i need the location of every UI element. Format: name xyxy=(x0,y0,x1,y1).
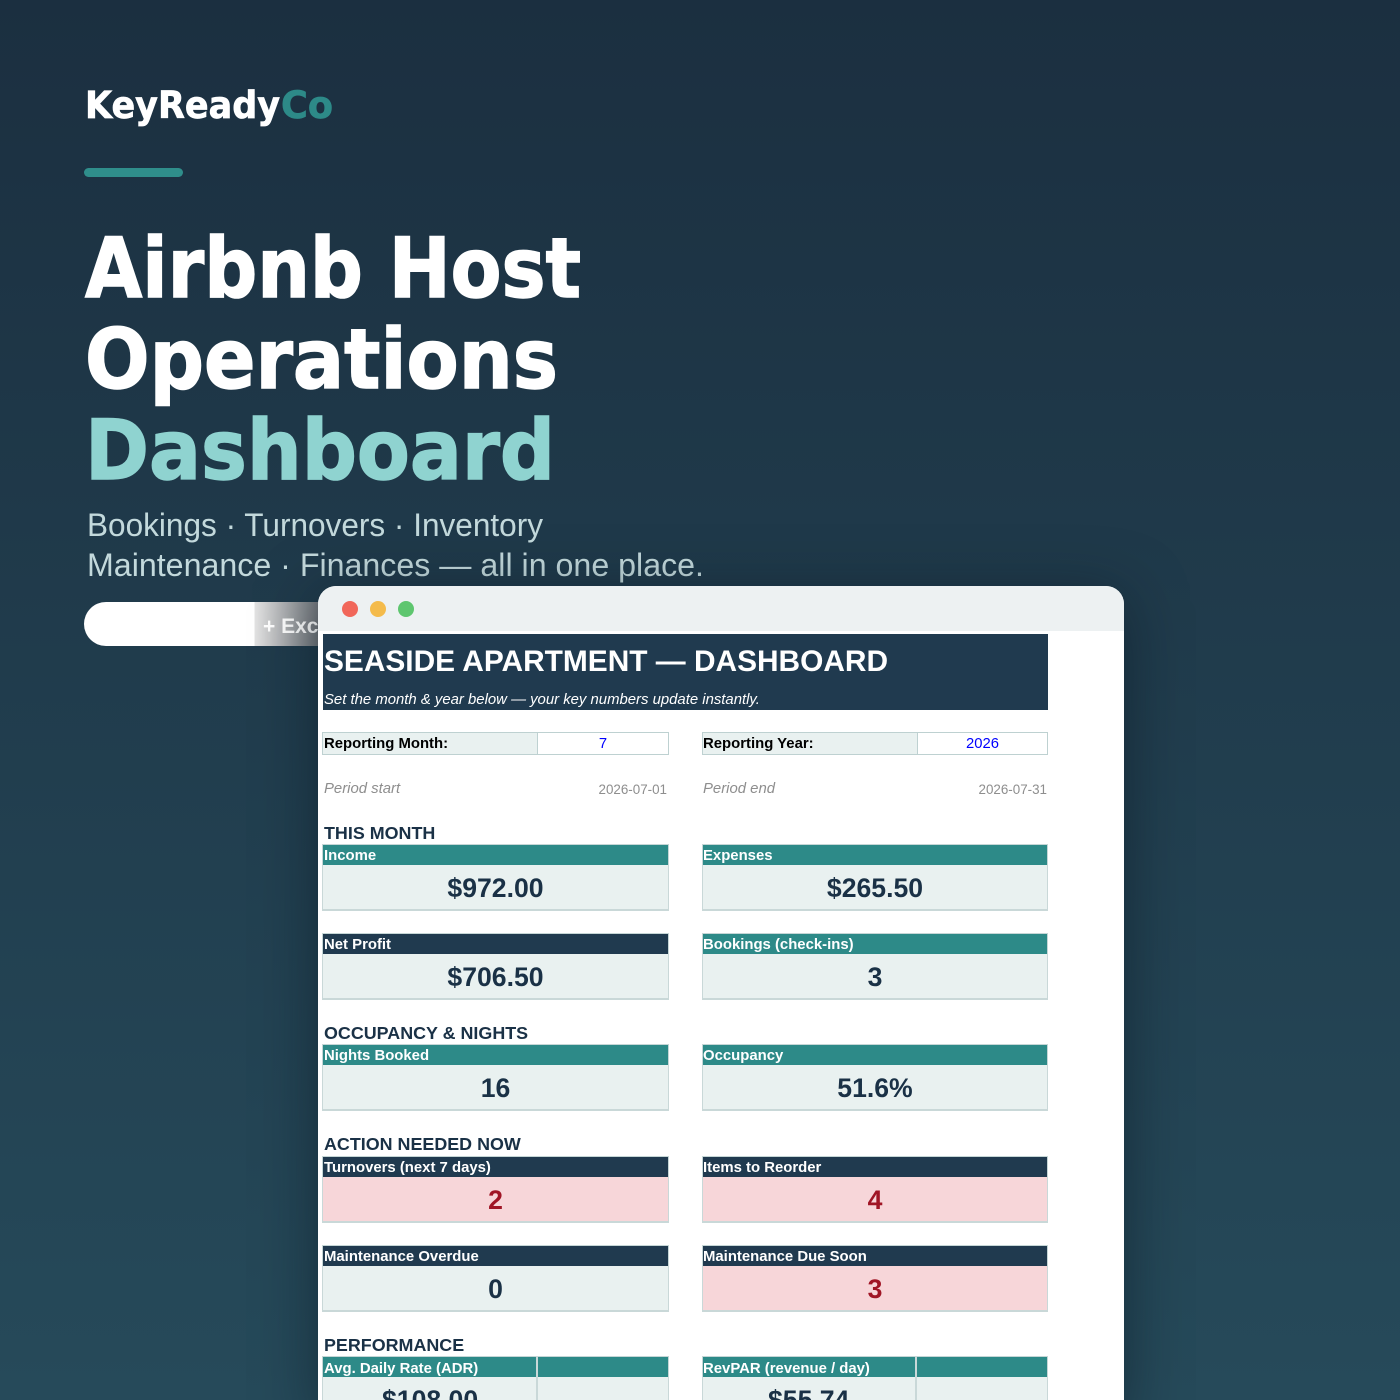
period start date: 2026-07-01 xyxy=(598,782,667,797)
kpi: maintenance overdue xyxy=(322,1245,669,1312)
badge pill: + Excel xyxy=(263,615,336,638)
title: Dashboard xyxy=(85,402,555,499)
window control: green xyxy=(398,601,414,617)
title xyxy=(84,220,581,499)
kpi: net profit xyxy=(322,933,669,1000)
kpi: occupancy: Occupancy xyxy=(703,1048,783,1064)
reporting year: 2026 xyxy=(966,736,999,752)
window control: yellow xyxy=(370,601,386,617)
kpi: items to reorder xyxy=(702,1156,1048,1223)
window control: red xyxy=(342,601,358,617)
kpi: income: $972.00 xyxy=(447,873,544,903)
title: Operations xyxy=(85,311,558,408)
kpi: bookings: Bookings (check-ins) xyxy=(703,937,854,953)
kpi: expenses xyxy=(702,844,1048,911)
kpi: turnovers: 2 xyxy=(488,1185,503,1215)
kpi: average daily rate xyxy=(322,1356,669,1400)
kpi: turnovers xyxy=(322,1156,669,1223)
kpi: occupancy xyxy=(702,1044,1048,1111)
kpi: revpar: RevPAR (revenue / day) xyxy=(703,1361,870,1377)
kpi: average daily rate: Avg. Daily Rate (ADR) xyxy=(324,1361,478,1377)
heading: this month: THIS MONTH xyxy=(324,823,435,843)
period end date: 2026-07-31 xyxy=(978,782,1047,797)
kpi: net profit: Net Profit xyxy=(324,937,391,953)
heading: action needed now: ACTION NEEDED NOW xyxy=(324,1134,521,1154)
sheet header banner xyxy=(323,634,1048,710)
sheet title: SEASIDE APARTMENT — DASHBOARD xyxy=(324,645,888,678)
kpi: revpar xyxy=(702,1356,1048,1400)
kpi: maintenance overdue: Maintenance Overdue xyxy=(324,1249,479,1265)
kpi: bookings xyxy=(702,933,1048,1000)
kpi: maintenance due soon: Maintenance Due Soon xyxy=(703,1249,867,1265)
subtitle: Maintenance · Finances — all in one place. xyxy=(87,547,704,583)
kpi: turnovers: Turnovers (next 7 days) xyxy=(324,1160,491,1176)
logo: Co xyxy=(281,84,333,127)
kpi: maintenance overdue: 0 xyxy=(488,1274,503,1304)
kpi: expenses: $265.50 xyxy=(827,873,923,903)
kpi: nights booked xyxy=(322,1044,669,1111)
subtitle: Bookings · Turnovers · Inventory xyxy=(87,507,543,543)
reporting month: 7 xyxy=(599,736,607,752)
window title bar xyxy=(318,586,1124,631)
heading: occupancy and nights: OCCUPANCY & NIGHTS xyxy=(324,1023,528,1043)
heading: performance: PERFORMANCE xyxy=(324,1335,464,1355)
kpi: maintenance due soon: 3 xyxy=(868,1274,882,1304)
kpi: nights booked: Nights Booked xyxy=(324,1048,429,1064)
kpi: maintenance due soon xyxy=(702,1245,1048,1312)
accent bar xyxy=(84,168,183,177)
reporting year: Reporting Year: xyxy=(703,736,814,752)
period start label: Period start xyxy=(324,781,400,797)
reporting month: Reporting Month: xyxy=(324,736,448,752)
kpi: income: Income xyxy=(324,848,376,864)
period end label: Period end xyxy=(703,781,775,797)
sheet subtitle: Set the month & year below — your key numbers update instantly. xyxy=(324,692,760,708)
reporting month xyxy=(322,732,669,755)
subtitle xyxy=(87,507,704,583)
kpi: expenses: Expenses xyxy=(703,848,773,864)
kpi: bookings: 3 xyxy=(868,962,882,992)
kpi: items to reorder: Items to Reorder xyxy=(703,1160,821,1176)
logo: KeyReady xyxy=(85,84,280,127)
reporting year xyxy=(702,732,1048,755)
dashboard window xyxy=(318,586,1124,1400)
kpi: income xyxy=(322,844,669,911)
kpi: items to reorder: 4 xyxy=(868,1185,882,1215)
badge pill xyxy=(84,602,384,646)
kpi: nights booked: 16 xyxy=(481,1073,510,1103)
kpi: occupancy: 51.6% xyxy=(837,1073,913,1103)
kpi: net profit: $706.50 xyxy=(447,962,544,992)
